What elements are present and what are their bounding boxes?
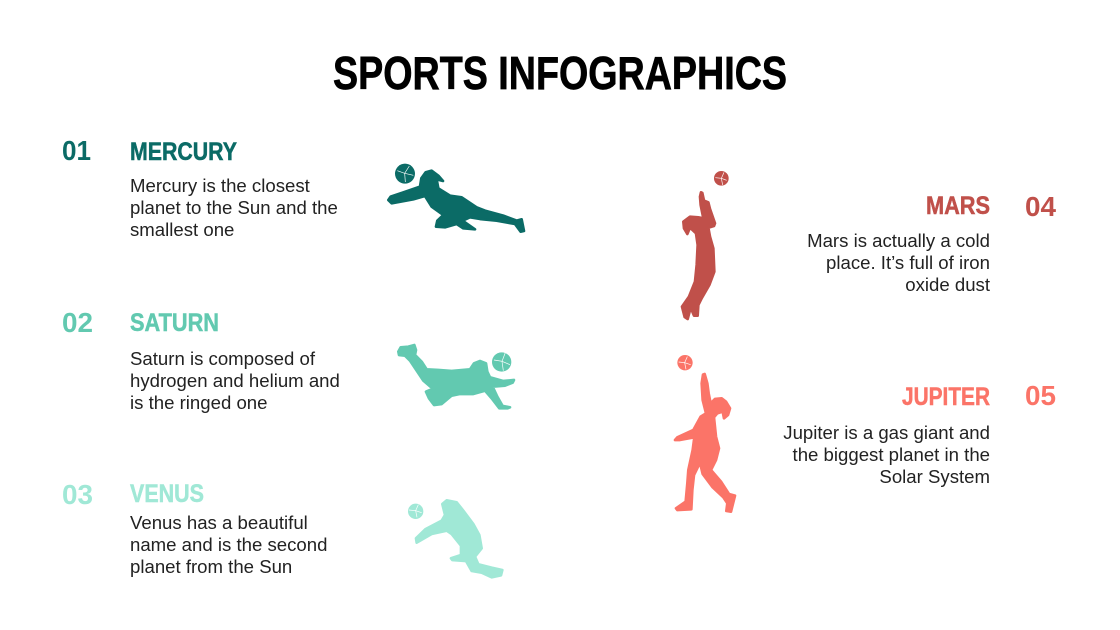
text: mercury description: planet to the Sun and the xyxy=(130,197,338,218)
text: mars description: Mars is actually a cold xyxy=(807,230,990,251)
icon: saturn player silhouette xyxy=(398,345,514,408)
panel: saturn xyxy=(62,307,514,413)
panel: mercury xyxy=(62,135,524,240)
number 04: 04 xyxy=(1025,191,1056,222)
text: saturn description: is the ringed one xyxy=(130,392,267,413)
number 02: 02 xyxy=(62,307,93,338)
panel: jupiter xyxy=(675,355,1056,512)
panel: venus xyxy=(62,479,502,577)
text: venus description: Venus has a beautiful xyxy=(130,512,308,533)
heading: mars: MARS xyxy=(926,192,990,220)
text: mars description: place. It’s full of iron xyxy=(826,252,990,273)
text: saturn description: hydrogen and helium and xyxy=(130,370,340,391)
heading: mercury: MERCURY xyxy=(130,138,237,166)
text: mercury description: smallest one xyxy=(130,219,234,240)
text: saturn description: Saturn is composed of xyxy=(130,348,316,369)
number 03: 03 xyxy=(62,479,93,510)
text: jupiter description: the biggest planet in the xyxy=(793,444,990,465)
icon: mercury player silhouette xyxy=(388,164,524,232)
text: mercury description: Mercury is the closest xyxy=(130,175,311,196)
heading: jupiter: JUPITER xyxy=(902,383,990,411)
text: jupiter description: Solar System xyxy=(879,466,990,487)
icon: mars player silhouette xyxy=(682,171,729,319)
icon: jupiter player silhouette xyxy=(675,355,735,512)
heading: saturn: SATURN xyxy=(130,309,219,337)
title: SPORTS INFOGRAPHICS xyxy=(333,47,787,99)
icon: venus player silhouette xyxy=(408,500,502,577)
text: jupiter description: Jupiter is a gas giant and xyxy=(783,422,990,443)
text: venus description: planet from the Sun xyxy=(130,556,292,577)
text: venus description: name and is the second xyxy=(130,534,327,555)
number 05: 05 xyxy=(1025,380,1056,411)
heading: venus: VENUS xyxy=(130,480,204,508)
number 01: 01 xyxy=(62,135,91,166)
text: mars description: oxide dust xyxy=(905,274,991,295)
panel: mars xyxy=(682,171,1056,319)
